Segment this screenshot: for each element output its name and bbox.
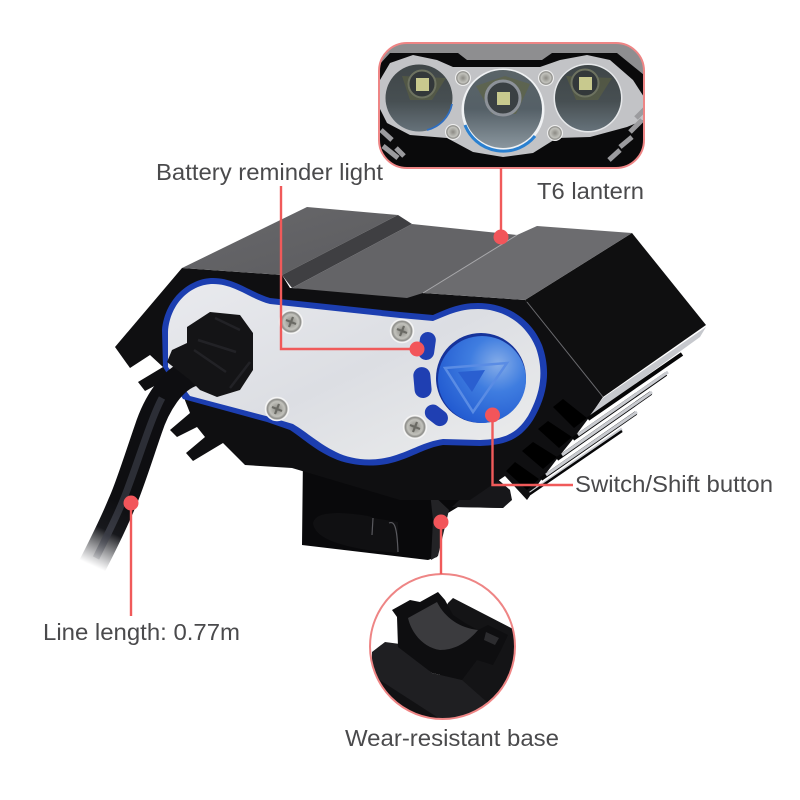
- power button: [436, 333, 526, 423]
- infographic canvas: [44, 42, 772, 746]
- lens plate screws: [446, 70, 562, 140]
- label: battery reminder light: Battery reminder light: [156, 159, 384, 185]
- silver lens plate: [379, 55, 644, 157]
- inset: T6 lantern close-up: [379, 43, 646, 168]
- rear clamp under fins: [452, 473, 512, 508]
- saddle clip: [392, 592, 448, 675]
- plate front face: [380, 680, 438, 718]
- mount base: [302, 455, 510, 560]
- gland ridges: [194, 318, 250, 388]
- screws: [266, 310, 426, 438]
- base plate: [372, 642, 487, 718]
- heat-sink fins: [381, 108, 646, 160]
- side edge highlight: [527, 302, 603, 397]
- housing side face: [525, 233, 706, 397]
- inset border: [379, 43, 644, 168]
- rubber pad: [408, 602, 478, 650]
- silver face plate: [168, 284, 540, 459]
- clip slot: [484, 632, 499, 645]
- label: wear-resistant base: Wear-resistant base: [345, 725, 559, 751]
- left lens: [386, 64, 452, 132]
- top surface right: [423, 226, 632, 300]
- housing front: [115, 268, 603, 500]
- heat sink slots: [506, 399, 587, 490]
- product: bike light: [90, 207, 706, 570]
- inset: wear-resistant base close-up: [370, 574, 515, 719]
- label: line length: Line length: 0.77m: [43, 619, 240, 645]
- label: switch/shift button: Switch/Shift button: [575, 471, 773, 497]
- blue panel border: [162, 278, 547, 465]
- cooling fins: [530, 327, 706, 494]
- label: T6 lantern: T6 lantern: [537, 178, 644, 204]
- rear rail: [440, 598, 514, 702]
- top surface left: [182, 207, 398, 275]
- cable: [90, 372, 194, 570]
- cable gland: [167, 312, 253, 397]
- top crease: [423, 235, 517, 293]
- circle border: [370, 574, 515, 719]
- right lens: [554, 64, 622, 132]
- centre lens: [462, 68, 544, 152]
- top groove: [282, 215, 412, 288]
- inset background: [379, 43, 644, 168]
- top surface centre: [292, 224, 517, 298]
- callout dots: [124, 230, 508, 530]
- top grey surface: [379, 43, 644, 75]
- callout lines: [131, 168, 573, 616]
- indicator lights: [413, 331, 451, 429]
- mount clip detail: [313, 492, 449, 560]
